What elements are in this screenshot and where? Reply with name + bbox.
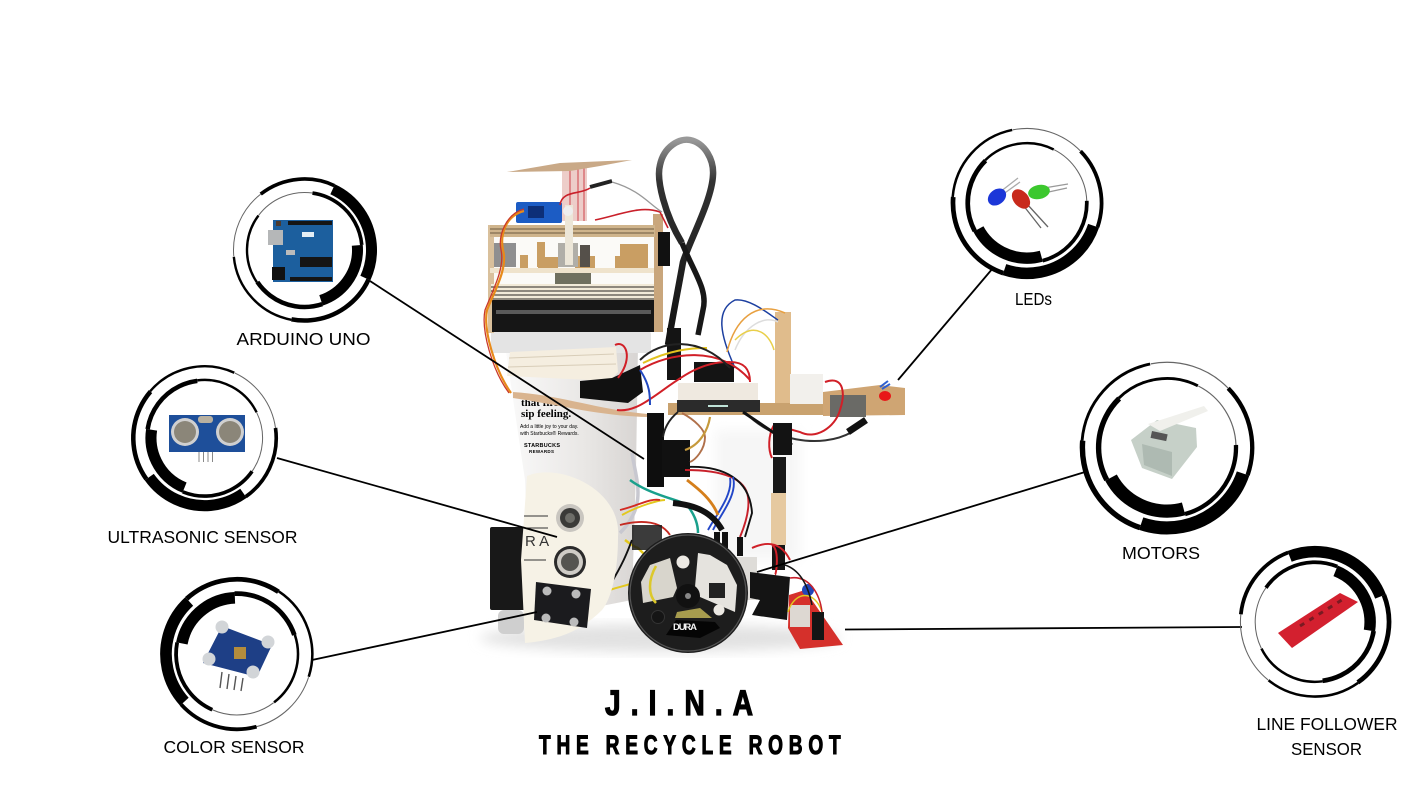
cup text: with Starbucks® Rewards.	[520, 430, 579, 437]
component: LEDs	[940, 116, 1114, 309]
grey magnet	[555, 273, 591, 284]
ring	[109, 343, 300, 533]
black tape on panel	[490, 527, 526, 610]
color sensor board on robot	[534, 582, 591, 628]
tan strap	[513, 392, 648, 417]
sensor board wires	[788, 596, 822, 612]
white grey wire strip	[620, 453, 638, 533]
orange servo wire	[486, 211, 524, 393]
sensor eye top	[556, 504, 584, 532]
top disc	[507, 160, 632, 172]
leader line: ultrasonic	[277, 458, 557, 537]
breadboard jumpers	[694, 362, 734, 382]
cup text: sip feeling.	[521, 408, 571, 420]
cup rim	[491, 331, 651, 353]
robot photo	[480, 140, 905, 653]
central black electronics	[647, 413, 664, 487]
connectors over motor	[717, 532, 740, 556]
ring	[940, 116, 1114, 290]
grey metal tape	[830, 395, 866, 417]
floor shadow	[480, 624, 840, 652]
jumper wires upper	[615, 300, 852, 458]
wiring mass lower	[610, 412, 752, 590]
label: LEDs	[1015, 289, 1052, 309]
top band	[490, 225, 655, 237]
LED on platform	[879, 381, 891, 401]
grey motor box	[697, 557, 757, 600]
component: Color sensor	[142, 559, 332, 757]
white semicircle panel	[521, 472, 618, 643]
cream shelf	[507, 347, 618, 381]
red line sensor board	[788, 590, 843, 649]
label: ULTRASONIC SENSOR	[108, 527, 298, 547]
leader line: motors	[757, 472, 1085, 572]
icon: line follower board	[1278, 593, 1358, 648]
component: Motors	[1067, 348, 1267, 563]
metal parts	[494, 243, 516, 267]
black plug	[667, 328, 681, 380]
sensor eye bottom	[554, 546, 586, 578]
wheel	[628, 533, 748, 653]
leader line: LEDs	[898, 268, 993, 380]
robot photo: R A	[525, 533, 549, 550]
left window	[641, 558, 677, 603]
motor label	[709, 583, 725, 598]
shelf strip	[490, 268, 654, 273]
wheel plate	[666, 620, 720, 638]
breadboard	[678, 383, 758, 401]
bottom window	[675, 608, 712, 618]
ring	[1067, 348, 1267, 547]
paper cup body	[505, 345, 638, 620]
striped layers	[491, 284, 654, 301]
wall shadow behind robot	[715, 430, 800, 560]
icon: ultrasonic module	[169, 415, 245, 462]
black clip on frame	[658, 232, 670, 266]
title: J.I.N.A	[605, 683, 753, 723]
wheel brand: DURA	[673, 622, 697, 633]
leader line: color sensor	[312, 612, 537, 660]
component: Arduino Uno	[224, 169, 385, 349]
yellow wire in left window	[650, 566, 656, 603]
red and grey top wires	[560, 188, 668, 228]
icon: Arduino board	[268, 220, 333, 282]
tan platform	[668, 403, 823, 415]
right window	[695, 553, 737, 612]
label: ARDUINO UNO	[236, 329, 370, 349]
leader line: line follower	[845, 627, 1242, 630]
black arc behind wheel	[673, 503, 722, 530]
icon: color sensor module	[202, 620, 274, 691]
title	[539, 683, 841, 760]
tan vertical mast	[775, 312, 791, 404]
label: LINE FOLLOWER	[1256, 714, 1398, 734]
top frame posts	[488, 225, 494, 333]
panel letters	[524, 516, 548, 560]
black band	[492, 300, 654, 332]
blue servo	[516, 202, 562, 223]
red wires by tape	[752, 544, 790, 575]
cup text: that first	[521, 397, 563, 409]
ring	[1210, 517, 1420, 727]
black tape motor mount	[750, 572, 790, 620]
grey caster	[498, 610, 524, 634]
leader line: Arduino	[370, 281, 644, 459]
ring	[142, 559, 332, 749]
label: COLOR SENSOR	[164, 737, 304, 757]
label: SENSOR	[1291, 739, 1362, 759]
ring	[224, 169, 385, 331]
breadboard black tape	[677, 400, 760, 412]
black cable loop	[659, 140, 713, 345]
spoke holes	[676, 556, 690, 568]
icon: servo motor	[1131, 406, 1208, 479]
hub	[676, 584, 700, 608]
vertical stick with tape	[771, 423, 792, 570]
component: Ultrasonic sensor	[108, 343, 300, 547]
white module	[790, 374, 823, 404]
cup text	[520, 397, 579, 454]
cup text: STARBUCKS	[524, 443, 560, 449]
component: Line follower sensor	[1210, 517, 1420, 759]
black wiring clump	[632, 525, 662, 550]
black tape under shelf	[580, 365, 643, 403]
label: MOTORS	[1122, 543, 1200, 563]
cardboard blocks	[520, 242, 648, 268]
cup text: Add a little joy to your day.	[520, 424, 578, 430]
cup text: REWARDS	[529, 449, 554, 454]
icon: LED trio	[985, 178, 1068, 228]
disc post ribbon	[562, 166, 587, 221]
label	[1256, 714, 1398, 759]
title: THE RECYCLE ROBOT	[539, 730, 841, 760]
right side wire plug	[848, 420, 866, 432]
white shaft	[565, 205, 573, 265]
top frame white interior	[494, 237, 654, 287]
